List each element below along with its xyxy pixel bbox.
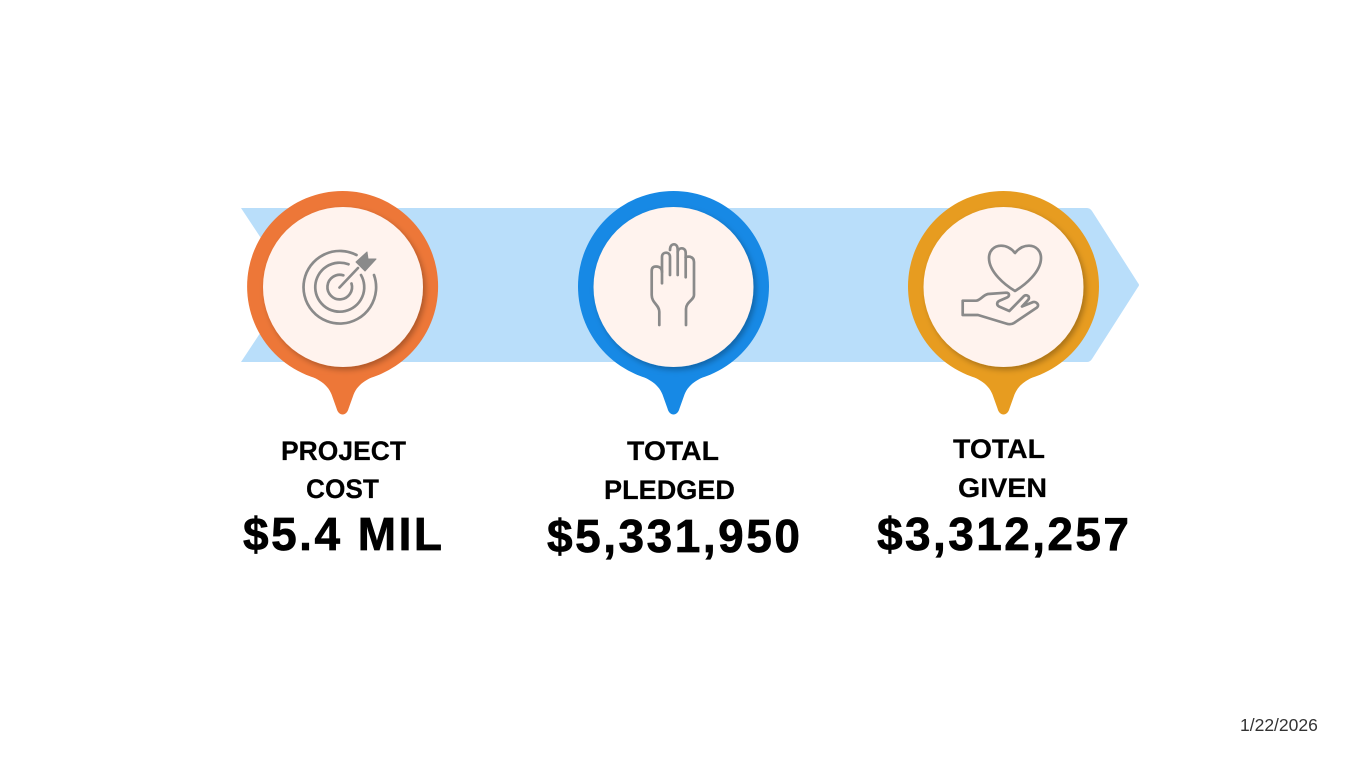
arrow band <box>241 208 1139 362</box>
icon: raised hand <box>652 244 694 325</box>
value: total given: $3,312,257 <box>877 508 1129 560</box>
pin: gold <box>908 191 1099 414</box>
icon: hand holding heart <box>963 246 1041 324</box>
value: project cost: $5.4 MIL <box>243 508 442 560</box>
panel: project cost <box>243 191 442 560</box>
panel: total given <box>877 191 1129 560</box>
heading: project cost: PROJECT <box>281 436 406 466</box>
heading: total pledged: PLEDGED <box>604 475 735 505</box>
panel: total pledged <box>547 191 800 562</box>
heading: project cost: COST <box>306 474 379 504</box>
heading: total given <box>953 434 1047 503</box>
value: total pledged: $5,331,950 <box>547 510 800 562</box>
pin: blue <box>578 191 769 414</box>
heading: total given: TOTAL <box>953 434 1045 464</box>
icon: target with arrow <box>304 251 376 324</box>
heading: project cost <box>281 436 406 504</box>
date: 1/22/2026 <box>1240 715 1318 735</box>
heading: total pledged <box>604 436 735 505</box>
heading: total given: GIVEN <box>958 473 1047 503</box>
heading: total pledged: TOTAL <box>627 436 719 466</box>
pin: orange <box>247 191 438 414</box>
